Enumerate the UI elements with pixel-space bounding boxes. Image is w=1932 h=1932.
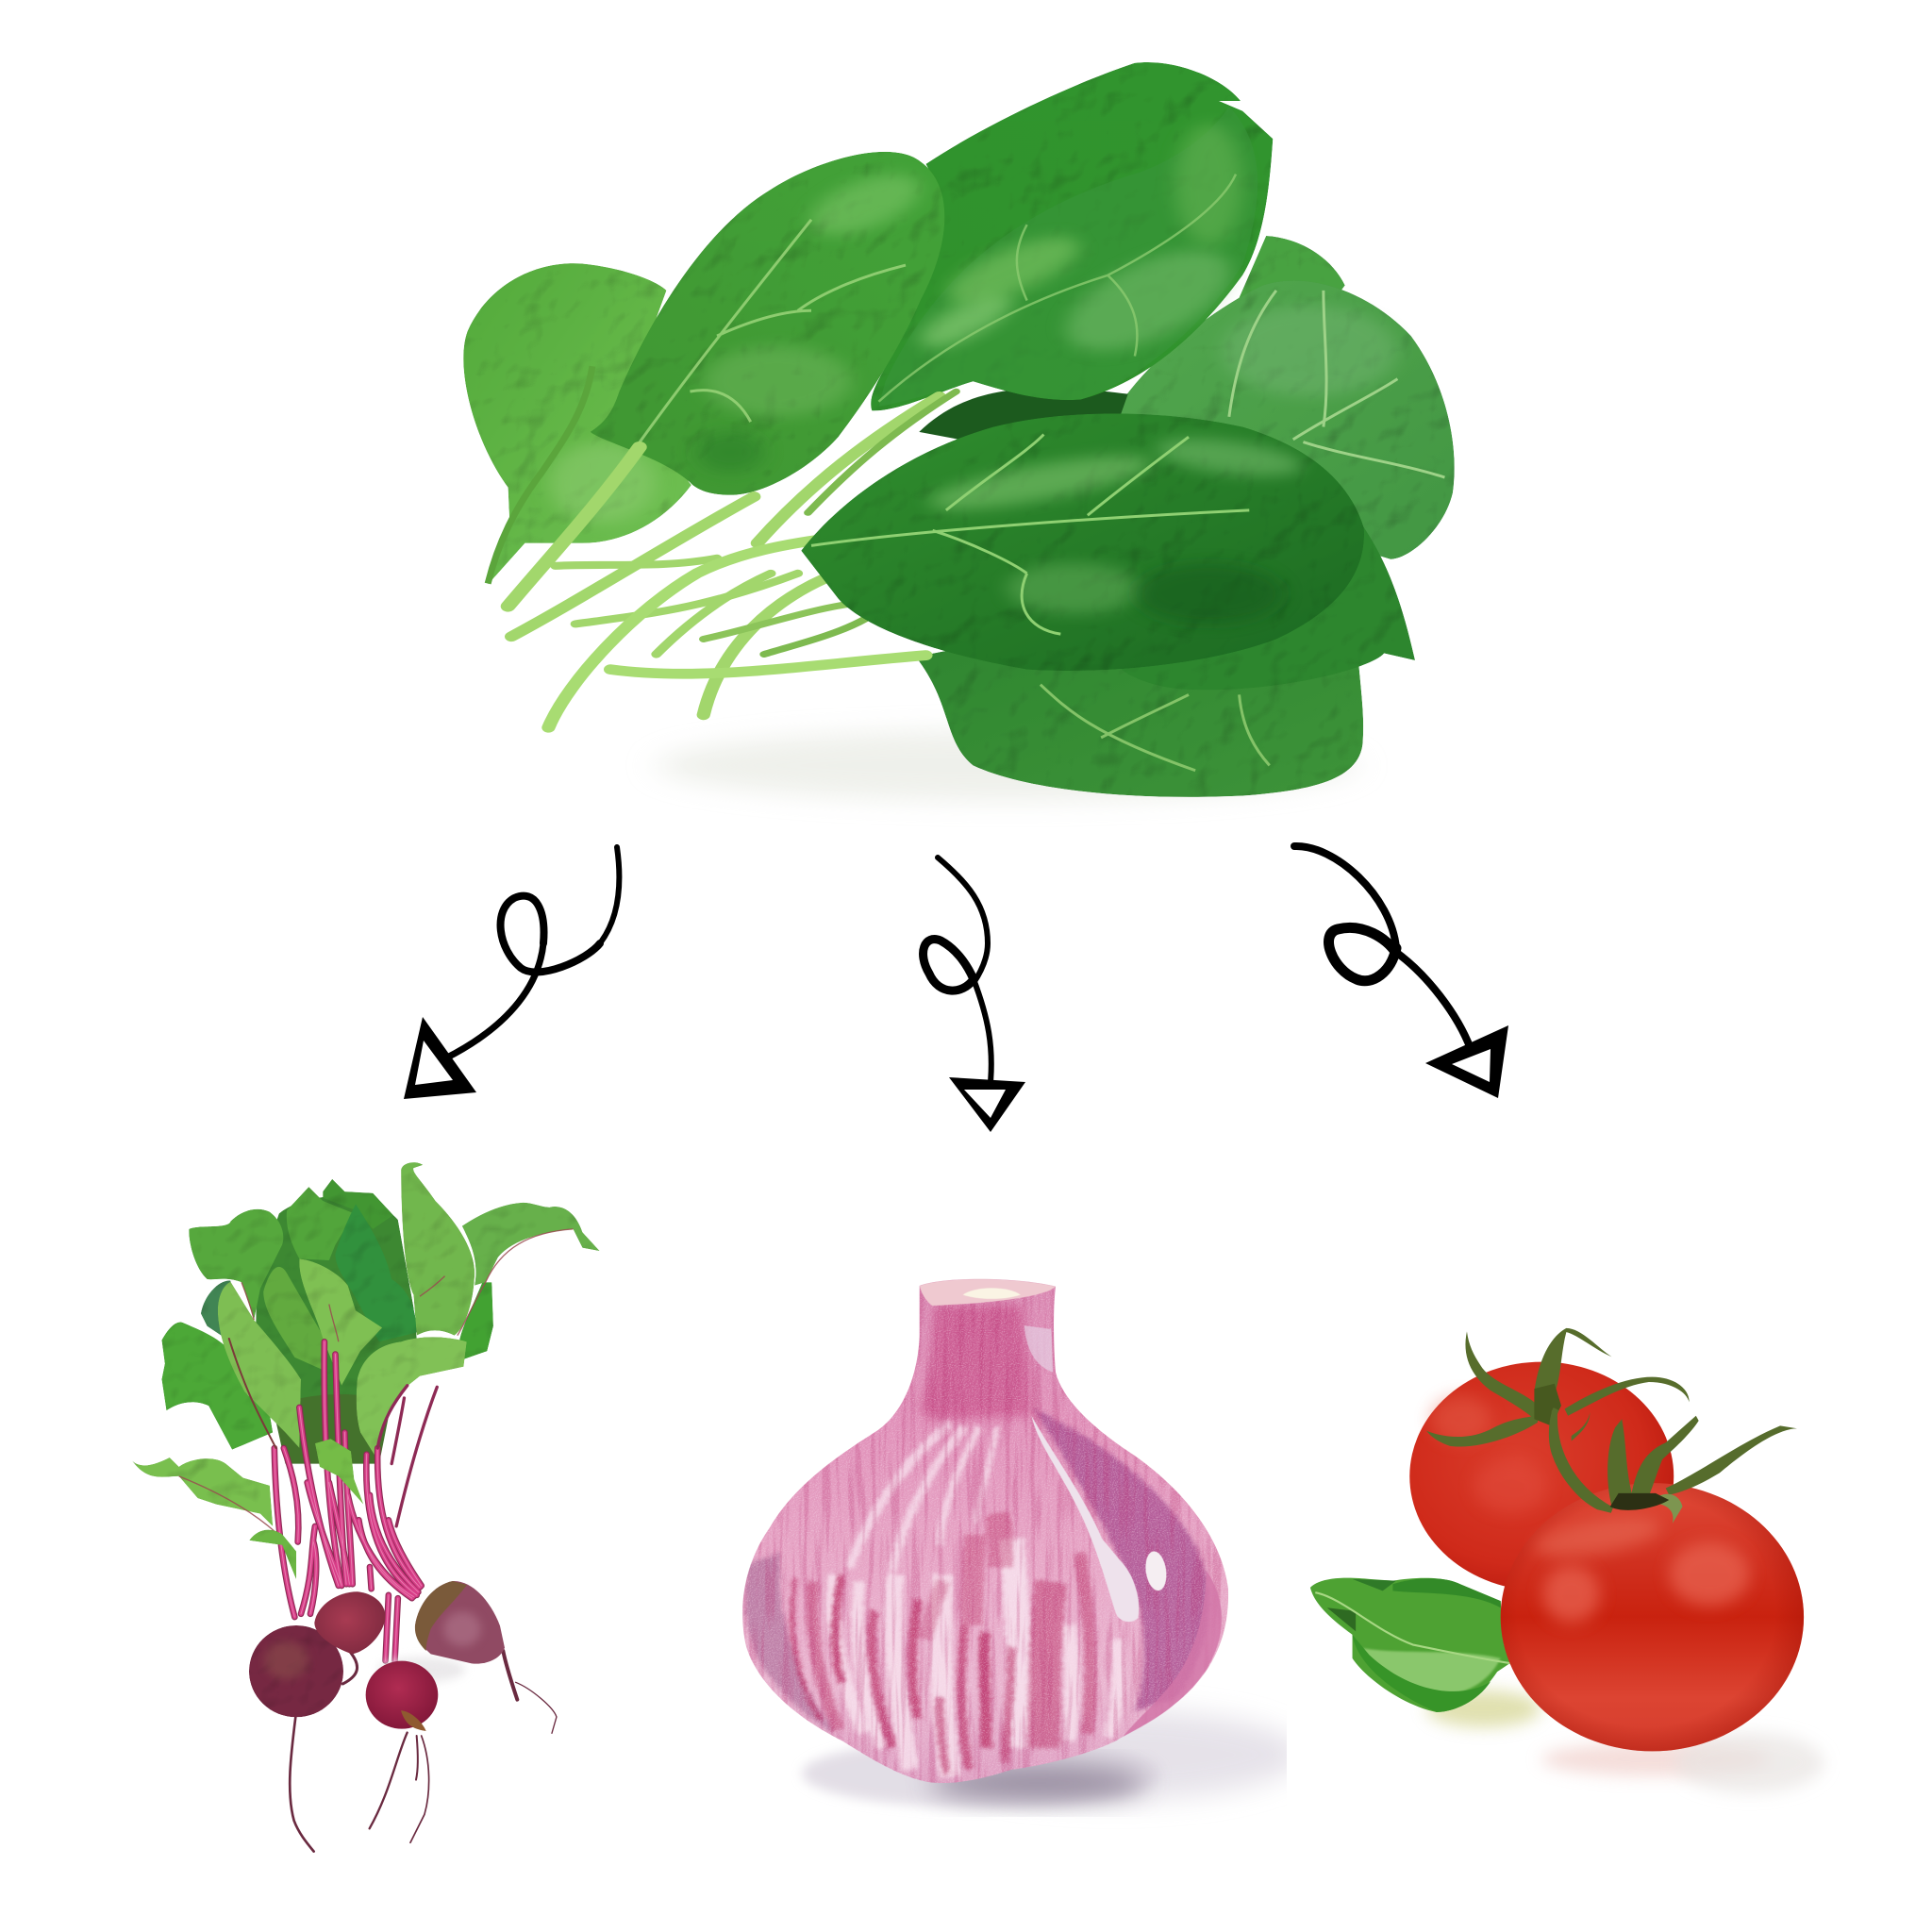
tomato calyx back [1426,1328,1690,1447]
tomato calyx front [1552,1409,1797,1524]
garlic neck opening [920,1279,1056,1306]
small low leaves [249,1439,363,1579]
garlic grainy stripes [745,1408,1209,1776]
right leaf [1108,281,1455,559]
beet roots [290,1651,557,1852]
garlic surface speckle [726,1286,1239,1791]
front tomato [1501,1483,1804,1751]
garlic neck colour patch [920,1306,1029,1420]
arrow to tomatoes [1294,846,1508,1098]
garlic white streak [1031,1416,1139,1622]
tomato shadows [1426,1690,1824,1793]
garlic right edge [1120,1571,1222,1740]
beetroot bulbs and roots [249,1581,557,1852]
back left pale leaf [463,263,691,585]
garlic skin base [742,1279,1228,1783]
beet bulb right [415,1581,505,1664]
beet leaves front [132,1162,600,1526]
beet bulb small [366,1661,438,1731]
front under flap [1122,518,1415,690]
front large leaf [801,413,1364,671]
arrow to beetroot [404,847,619,1099]
garlic shadow [802,1709,1302,1807]
bottom leaf [916,619,1363,797]
beetroot leaves and stems [132,1162,600,1661]
beet leaf veins [179,1229,574,1533]
basil leaf [1310,1578,1512,1712]
beet bulb middle [314,1591,385,1654]
spinach stems [508,447,754,637]
garlic bulb [742,1279,1228,1783]
left front leaf [591,152,944,495]
garlic white spot [1145,1551,1166,1591]
beet leaves behind [161,1179,493,1450]
garlic neck pale right [1024,1325,1053,1373]
back stems [556,391,957,715]
beet bulb left [249,1625,343,1717]
beet dark bundle backing [273,1394,391,1464]
soft shadow under spinach [657,730,1357,801]
back right small leaf [1229,236,1345,341]
front stems [548,536,925,727]
back tomato [1409,1362,1674,1591]
beet bulb shadow [377,1657,465,1682]
spinach bunch [463,62,1455,801]
upper large leaf [871,62,1273,410]
dark shaded middle leaf [919,388,1128,442]
garlic fine ribs [741,1286,1228,1788]
arrow to garlic [924,858,1025,1132]
beet stems [229,1339,437,1661]
tomatoes with basil [1310,1328,1824,1793]
